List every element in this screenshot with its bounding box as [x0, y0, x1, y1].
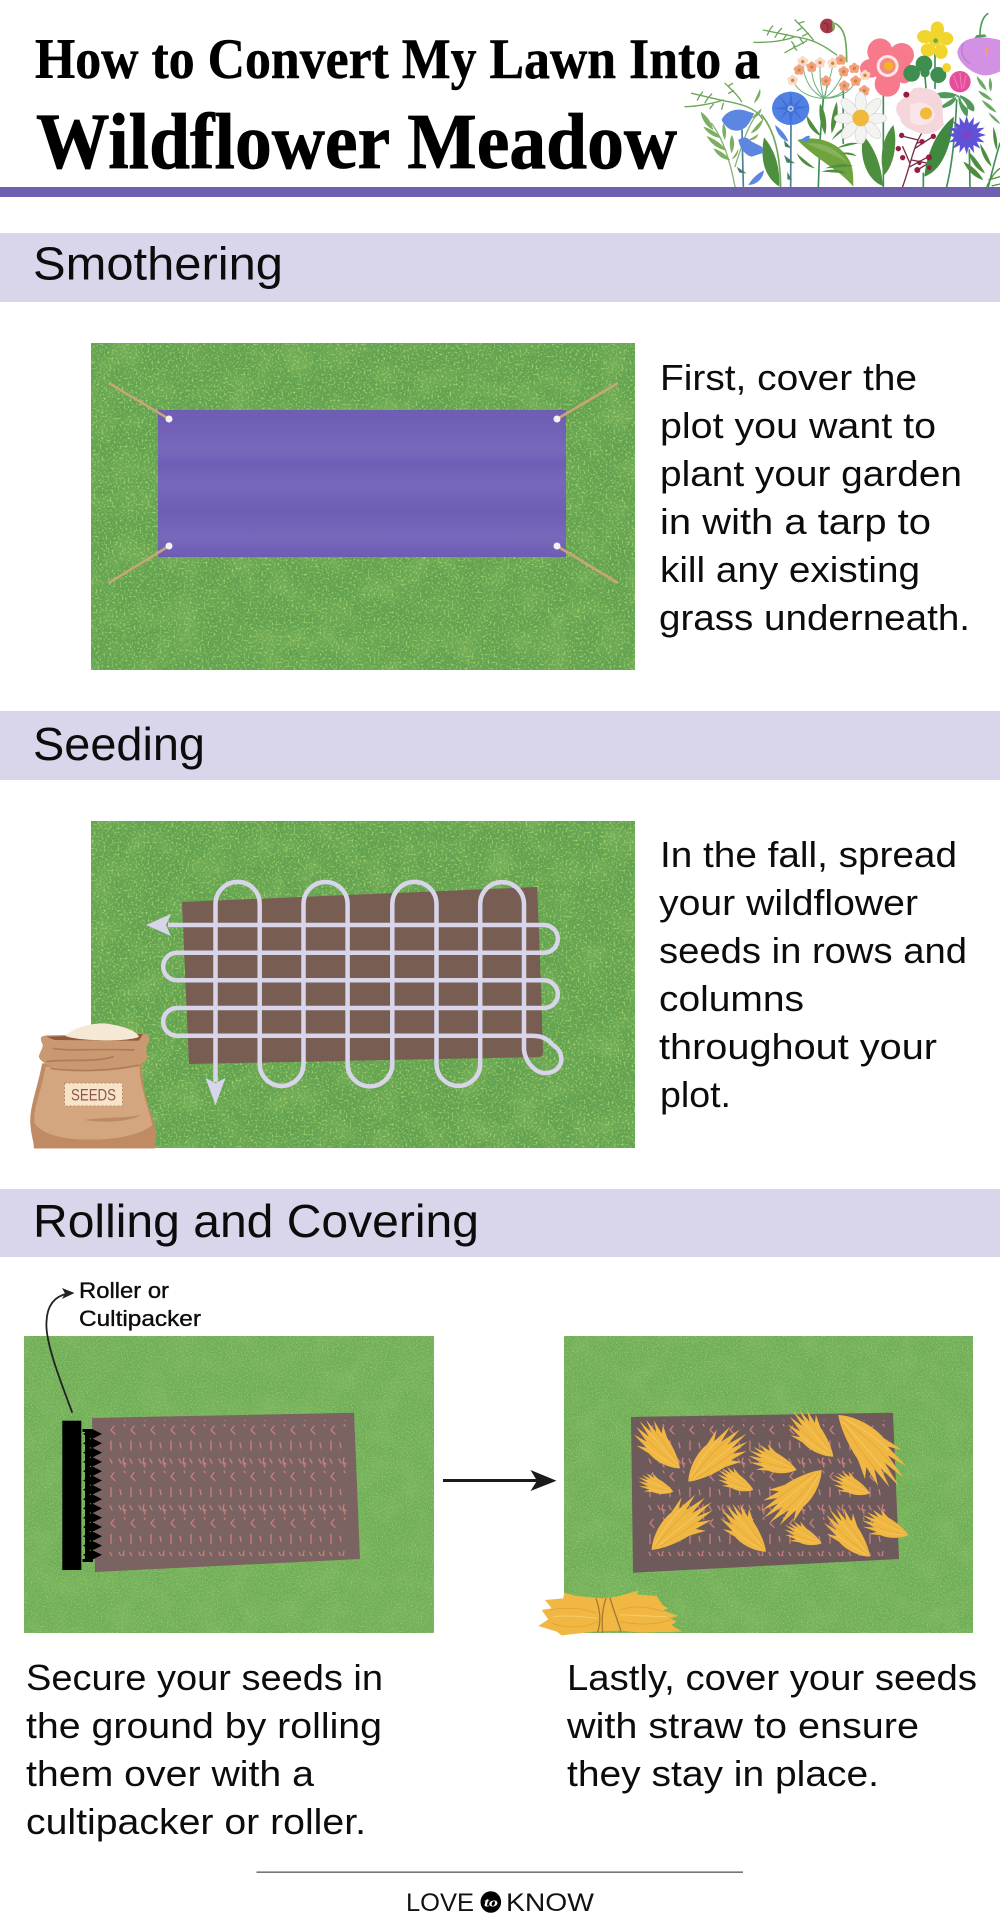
- sack label: SEEDS: [71, 1086, 116, 1104]
- flower: blue chicory: [722, 110, 810, 185]
- label: Roller or Cultipacker: [79, 1278, 201, 1331]
- text: smothering instructions: grass underneath.: [659, 597, 970, 638]
- straw tufts on plot: [626, 1398, 919, 1569]
- flower: pink anemone: [860, 38, 914, 97]
- arrow: between steps: [443, 1470, 556, 1491]
- section: Smothering: [0, 233, 1000, 670]
- section: Seeding: [0, 711, 1000, 1148]
- footer rule: [256, 1872, 743, 1873]
- flower: coral umbrella cluster: [787, 54, 870, 95]
- title: Wildflower Meadow: [36, 99, 677, 186]
- tarp ropes and grommets: [109, 383, 618, 583]
- tarp: [158, 410, 566, 557]
- soil plot with seeds: [631, 1413, 899, 1573]
- straw bundle: [538, 1591, 682, 1635]
- text: covering instructions: with straw to ensure: [566, 1705, 919, 1746]
- soil plot with seeds: [92, 1413, 360, 1572]
- lawn: [24, 1336, 434, 1633]
- section heading: Rolling and Covering: [0, 1189, 1000, 1257]
- lawn: [564, 1336, 973, 1633]
- text: smothering instructions: kill any existing: [660, 549, 920, 590]
- logo: LoveToKnow: LOVE: [406, 1889, 474, 1917]
- flower: lilac poppy: [957, 13, 1000, 75]
- lawn: [91, 343, 635, 670]
- flower: pink clover: [949, 71, 971, 92]
- text: rolling instructions: cultipacker or roller.: [26, 1801, 366, 1842]
- title: How to Convert My Lawn Into a: [35, 28, 760, 91]
- lawn: [91, 821, 635, 1148]
- text: rolling instructions: Secure your seeds in: [26, 1657, 383, 1698]
- flower: clover leaves: [903, 56, 951, 83]
- illustration: rolling the plot: [24, 1336, 434, 1633]
- arrow: rows direction: [146, 914, 171, 936]
- illustration: tarp on lawn: [91, 343, 635, 670]
- roller: [62, 1421, 102, 1570]
- arrow: label to roller: [46, 1288, 74, 1413]
- section heading: Seeding: Seeding: [33, 718, 205, 770]
- label: Roller or Cultipacker: Roller or: [79, 1278, 169, 1303]
- section heading: Seeding: [0, 711, 1000, 780]
- logo: LoveToKnow: KNOW: [506, 1889, 594, 1917]
- purple header rule: [0, 187, 1000, 197]
- text: rolling instructions: the ground by rolling: [26, 1705, 382, 1746]
- text: seeding instructions: your wildflower: [659, 882, 918, 923]
- text: smothering instructions: plot you want to: [660, 405, 936, 446]
- section heading: Rolling and Covering: Rolling and Covering: [33, 1195, 479, 1247]
- illustration: seed sack: [30, 1023, 156, 1148]
- illustration: seeding pattern on lawn: [30, 821, 635, 1148]
- seeding rows and columns: [163, 882, 561, 1086]
- illustration: wildflowers: [685, 13, 1000, 187]
- text: covering instructions: [566, 1657, 977, 1794]
- section heading: Smothering: Smothering: [33, 238, 283, 290]
- text: seeding instructions: seeds in rows and: [659, 930, 967, 971]
- section heading: Smothering: [0, 233, 1000, 302]
- text: smothering instructions: plant your garden: [660, 453, 962, 494]
- flower: blue cornflower: [772, 91, 809, 127]
- text: seeding instructions: plot.: [660, 1074, 731, 1115]
- text: seeding instructions: columns: [659, 978, 804, 1019]
- flower: red berries: [896, 92, 936, 173]
- text: smothering instructions: in with a tarp to: [660, 501, 931, 542]
- text: seeding instructions: throughout your: [659, 1026, 937, 1067]
- logo: LoveToKnow: to: [484, 1894, 499, 1910]
- text: covering instructions: Lastly, cover your seeds: [567, 1657, 977, 1698]
- flower: yellow buttercup: [917, 21, 953, 59]
- title: [35, 28, 760, 186]
- soil plot: [182, 887, 543, 1064]
- flower: daisy: [834, 92, 887, 144]
- text: rolling instructions: them over with a: [26, 1753, 315, 1794]
- text: smothering instructions: [659, 357, 970, 638]
- logo: LoveToKnow: [406, 1889, 594, 1917]
- label: Roller or Cultipacker: Cultipacker: [79, 1306, 201, 1331]
- section: Rolling and Covering: [0, 1189, 1000, 1842]
- text: rolling instructions: [26, 1657, 383, 1842]
- flower: pale pink rose: [896, 88, 944, 134]
- text: seeding instructions: In the fall, spread: [660, 834, 957, 875]
- text: seeding instructions: [659, 834, 967, 1115]
- flower: bud: [820, 19, 835, 33]
- illustration: covering with straw: [538, 1336, 973, 1635]
- arrow: columns direction: [206, 1078, 226, 1105]
- flower: purple cornflower: [947, 116, 986, 154]
- text: smothering instructions: First, cover the: [660, 357, 917, 398]
- leaves: [701, 76, 1000, 187]
- text: covering instructions: they stay in place.: [567, 1753, 879, 1794]
